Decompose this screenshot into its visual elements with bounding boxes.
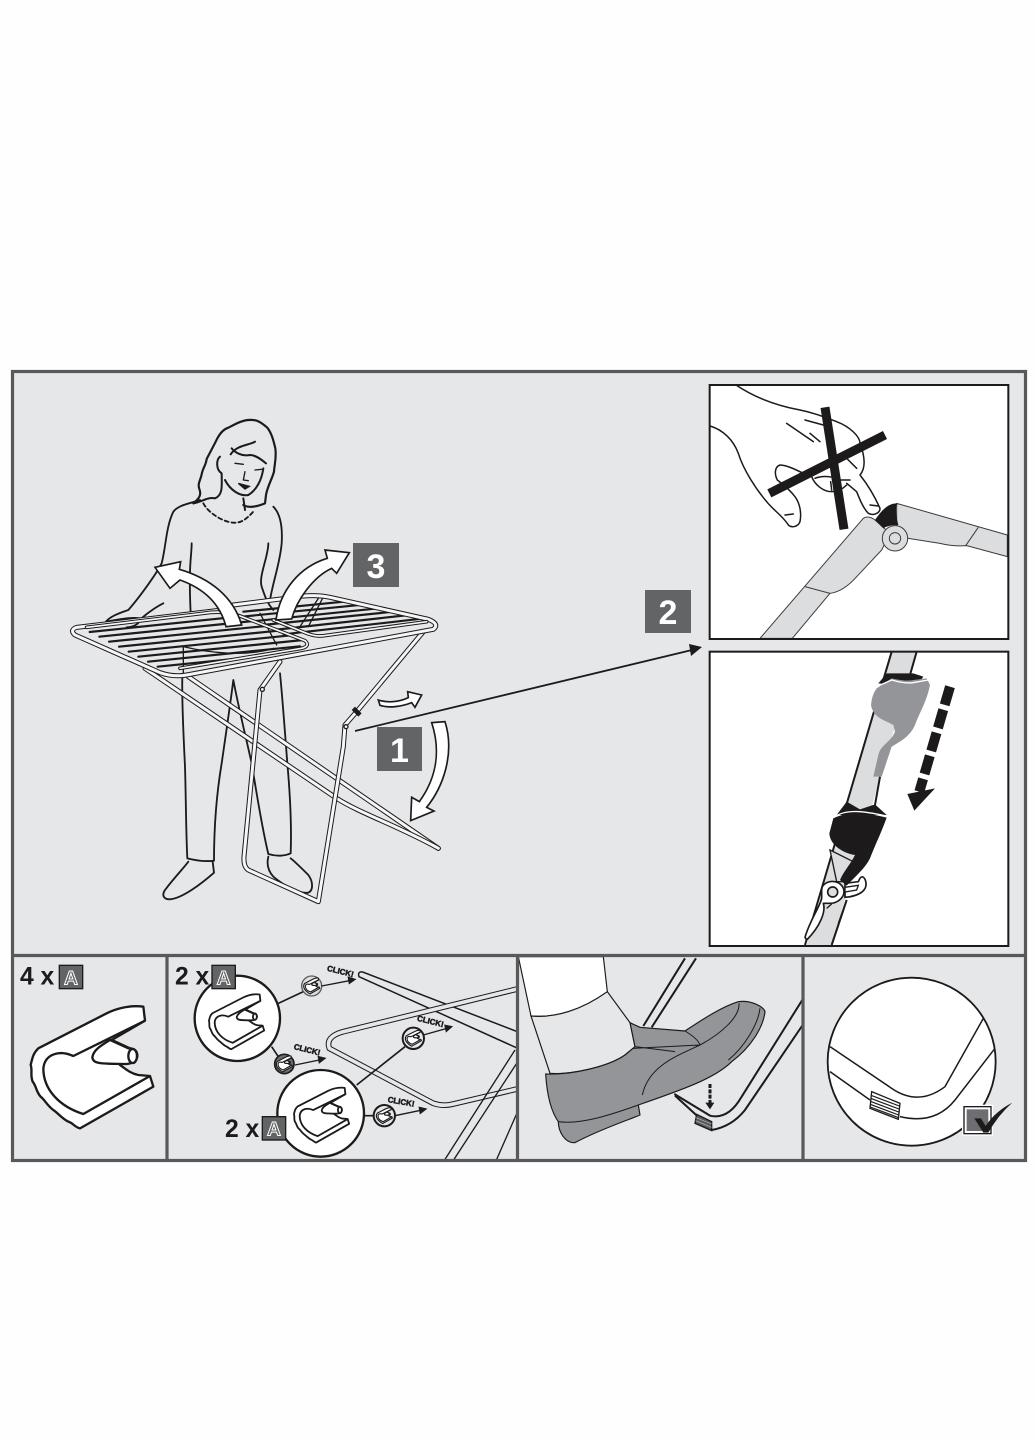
panel: four clips: [20, 963, 153, 1128]
arrow: leg down: [411, 722, 449, 821]
connector lines: [272, 992, 405, 1116]
dashed arrow: [907, 687, 950, 811]
rack frames: [73, 596, 436, 676]
label 4 x A: A: [64, 968, 78, 989]
hinge: [760, 503, 1007, 638]
frame lines: [12, 372, 1026, 1160]
hand: [710, 385, 880, 527]
label lower 2 x A: 2 x: [225, 1116, 260, 1143]
label 4 x A: 4 x: [20, 963, 55, 990]
end cap: [870, 1092, 900, 1119]
catch and pivot: [805, 850, 866, 940]
label upper 2 x A: [175, 963, 235, 990]
inset: sliding sleeve: [710, 652, 1008, 946]
step 2 badge: [645, 590, 691, 633]
frame in perspective: [329, 972, 520, 1159]
click arrows: [295, 977, 452, 1116]
panel: clip placement: [175, 963, 520, 1159]
tube: [807, 652, 917, 945]
click labels: CLICK!: [293, 1042, 321, 1057]
panel: foot cap detail: [825, 975, 1012, 1148]
label 4 x A: [20, 963, 83, 990]
icon: clip: [31, 1006, 153, 1128]
arrow: small unfold: [378, 692, 422, 707]
prohibition cross: [769, 407, 885, 529]
upper sleeve, grey: [871, 673, 930, 777]
head and hair: [193, 420, 276, 523]
dashed down arrow: [705, 1084, 714, 1109]
arrow: left wing up: [155, 562, 242, 627]
shoe: [546, 1001, 765, 1143]
panel: foot pressing pedal: [518, 957, 803, 1143]
pedal: [695, 1114, 712, 1131]
frame tubes: [643, 958, 696, 1027]
label upper 2 x A: A: [217, 968, 231, 989]
label upper 2 x A: 2 x: [175, 963, 210, 990]
rack slats: [90, 601, 425, 667]
rack legs: [145, 597, 438, 902]
click labels: CLICK!: [326, 964, 355, 979]
lower sleeve, black: [829, 802, 887, 886]
click labels: CLICK!: [416, 1014, 445, 1029]
small clip markers: [275, 976, 424, 1126]
label lower 2 x A: [225, 1116, 286, 1143]
check box: [962, 1103, 1012, 1136]
step 3 badge: [353, 543, 399, 587]
step 3 badge: 3: [367, 548, 385, 586]
illustration: woman unfolding drying rack: [73, 420, 449, 902]
inset: do not touch hinge: [710, 385, 1008, 639]
detail circle upper: [195, 976, 280, 1061]
leader arrow to insets: [355, 644, 702, 731]
sock: [518, 957, 607, 1016]
woman figure: [106, 420, 312, 899]
frame background: [12, 372, 1026, 1160]
click labels: [293, 964, 445, 1109]
step 2 badge: 2: [659, 594, 677, 632]
click labels: CLICK!: [387, 1095, 415, 1109]
step 1 badge: 1: [390, 732, 409, 770]
detail circle lower: [277, 1070, 364, 1157]
label lower 2 x A: A: [267, 1120, 281, 1141]
arrow: right wing up: [276, 550, 349, 620]
step 1 badge: [377, 727, 422, 771]
